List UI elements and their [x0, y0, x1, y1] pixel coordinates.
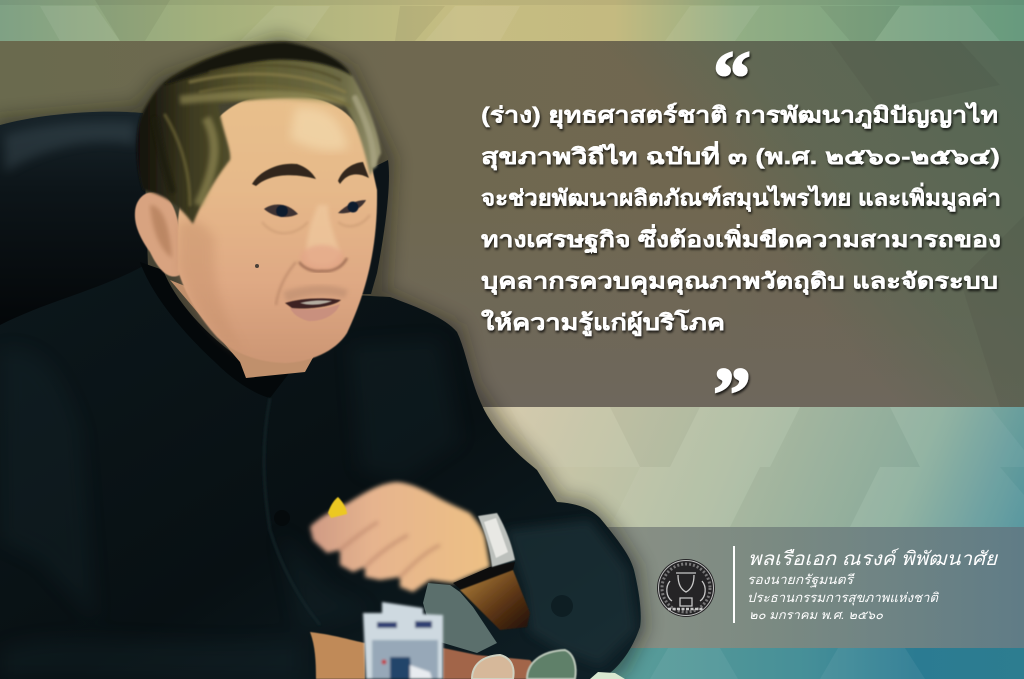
- quote body text: ให้ความรู้แก่ผู้บริโภค: [481, 309, 725, 337]
- lower hand: [310, 632, 365, 679]
- nostril shadow: [299, 258, 347, 271]
- nasolabial fold: [276, 262, 296, 305]
- eyebrow right: [338, 162, 369, 184]
- mouth: [285, 298, 341, 309]
- left spectacle lens: [472, 655, 514, 679]
- lower arm right: [443, 648, 545, 679]
- hair golden hairline: [180, 95, 345, 205]
- background: bottom teal strip: [590, 648, 1024, 679]
- finger shadows: [340, 522, 440, 577]
- caption text: [747, 548, 999, 622]
- figure shadow: [0, 42, 640, 679]
- caption divider: [733, 546, 735, 623]
- gap between arm and torso: [423, 583, 497, 653]
- hair dark top: [163, 42, 352, 85]
- cheek shading: [178, 220, 245, 355]
- hair streaks: [155, 65, 374, 205]
- placket line: [264, 398, 320, 625]
- nose bridge: [306, 205, 340, 266]
- eyebrow left: [252, 164, 316, 186]
- jacket button: [274, 510, 290, 526]
- yellow pin: [328, 497, 347, 518]
- moustache shadow: [283, 285, 348, 302]
- watch: [478, 513, 515, 567]
- forehead highlight: [290, 107, 348, 151]
- teeth: [300, 300, 332, 305]
- chair highlight: [5, 122, 135, 172]
- portrait of speaker: [0, 42, 641, 679]
- eye bags: [262, 215, 370, 233]
- caption text: ๒๐ มกราคม พ.ศ. ๒๕๖๐: [749, 608, 884, 622]
- caption band: [560, 527, 1024, 648]
- mole: [255, 264, 259, 268]
- jacket: [0, 265, 641, 679]
- hair: [137, 42, 381, 224]
- eye left: [264, 205, 298, 217]
- quote body text: จะช่วยพัฒนาผลิตภัณฑ์สมุนไพรไทย และเพิ่มมูลค่า: [481, 182, 1001, 212]
- face: [178, 95, 377, 363]
- quote mark open: “: [713, 36, 751, 120]
- sleeve highlight: [505, 520, 636, 665]
- forearm: [460, 570, 530, 630]
- emblem seal: [657, 559, 715, 617]
- ear inner: [150, 205, 172, 258]
- ear: [135, 192, 181, 277]
- background: hexagon pattern top band: [0, 0, 1024, 41]
- neck: [170, 280, 320, 378]
- lower lip: [290, 304, 340, 321]
- caption text: พลเรือเอก ณรงค์ พิพัฒนาศัย: [748, 548, 999, 570]
- chair right edge: [362, 160, 389, 294]
- quote body text: สุขภาพวิถีไท ฉบับที่ ๓ (พ.ศ. ๒๕๖๐-๒๕๖๔): [481, 140, 1000, 171]
- hand: [310, 482, 490, 592]
- cuff button: [551, 595, 573, 617]
- nose tip: [300, 245, 344, 271]
- quote body text: [481, 102, 1001, 337]
- quote body text: ทางเศรษฐกิจ ซึ่งต้องเพิ่มขีดความสามารถของ: [481, 223, 1001, 254]
- eye right: [338, 200, 366, 213]
- right spectacle lens: [527, 650, 576, 679]
- watch face detail: [484, 518, 508, 558]
- collar: [140, 262, 290, 398]
- watch strap: [453, 562, 515, 589]
- background: dark quote band: [0, 41, 1024, 407]
- background: lower patterned area: [0, 407, 1024, 648]
- caption text: ประธานกรรมการสุขภาพแห่งชาติ: [747, 590, 939, 606]
- quote mark close: ”: [713, 353, 751, 437]
- quote body text: บุคลากรควบคุมคุณภาพวัตถุดิบ และจัดระบบ: [481, 268, 998, 296]
- papers on desk: [590, 672, 625, 679]
- jacket folds: [0, 340, 460, 679]
- chair back: [0, 112, 150, 330]
- quote body text: (ร่าง) ยุทธศาสตร์ชาติ การพัฒนาภูมิปัญญาไท: [481, 102, 998, 130]
- glass nameplate: [363, 602, 443, 679]
- caption text: รองนายกรัฐมนตรี: [747, 572, 855, 588]
